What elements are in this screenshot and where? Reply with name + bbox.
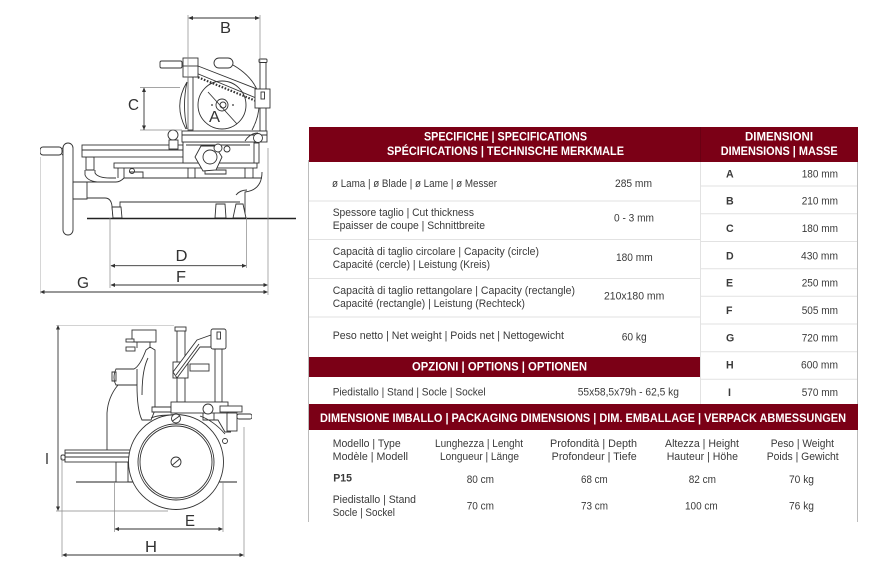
dimensions column: 570 mm bbox=[802, 387, 838, 399]
specification rows: Capacità di taglio rettangolare | Capacity (rectangle) bbox=[333, 285, 575, 297]
dimensions column: I bbox=[728, 387, 731, 399]
dimensions column: B bbox=[726, 196, 734, 208]
packaging table: 70 cm bbox=[467, 500, 494, 512]
dimension A: A bbox=[209, 109, 220, 126]
dimension G: G bbox=[77, 275, 89, 292]
dimensions column: A bbox=[726, 168, 734, 180]
packaging table: 82 cm bbox=[689, 474, 716, 486]
packaging table: 70 kg bbox=[789, 474, 814, 486]
side view drawing of the slicer bbox=[40, 15, 296, 295]
table frame and rules bbox=[308, 127, 858, 522]
packaging table: Hauteur | Höhe bbox=[667, 451, 738, 463]
packaging table: Peso | Weight bbox=[771, 438, 834, 450]
packaging table: 73 cm bbox=[581, 500, 608, 512]
header band: specifications and dimensions: SPECIFICHE | SPECIFICATIONS bbox=[424, 130, 587, 144]
specification rows: 180 mm bbox=[616, 252, 653, 264]
specifications table bbox=[308, 127, 858, 522]
specification rows: Epaisser de coupe | Schnittbreite bbox=[333, 220, 485, 232]
dimensions column: D bbox=[726, 250, 734, 262]
blade housing and blade bbox=[160, 58, 270, 163]
dimensions column: 430 mm bbox=[801, 250, 838, 262]
options band: OPZIONI | OPTIONS | OPTIONEN bbox=[412, 360, 587, 374]
header band: specifications and dimensions: DIMENSIONS | MASSE bbox=[721, 144, 838, 158]
carriage block and handle bbox=[171, 402, 252, 432]
dimensions column: G bbox=[726, 332, 734, 344]
machine base bbox=[85, 157, 262, 218]
front view drawing of the slicer bbox=[45, 325, 252, 557]
posts and clamp arm bbox=[173, 327, 226, 402]
packaging table: 76 kg bbox=[789, 500, 814, 512]
specification rows: Spessore taglio | Cut thickness bbox=[333, 207, 474, 219]
packaging table: Profondità | Depth bbox=[550, 438, 637, 450]
options row: Piedistallo | Stand | Socle | Sockel bbox=[333, 387, 486, 399]
dimension I bbox=[45, 325, 174, 511]
rear column and head bbox=[107, 330, 171, 450]
packaging table: Longueur | Länge bbox=[440, 451, 519, 463]
dimension C bbox=[128, 88, 182, 130]
dimension G bbox=[40, 157, 268, 294]
dimensions column bbox=[726, 168, 838, 399]
specification rows bbox=[332, 178, 664, 344]
specification rows: 285 mm bbox=[615, 178, 652, 190]
dimensions column: 250 mm bbox=[802, 278, 838, 290]
specification rows: 60 kg bbox=[622, 332, 647, 344]
packaging table: Modèle | Modell bbox=[333, 451, 408, 463]
sliding bar and foot bbox=[61, 450, 132, 482]
packaging table: Piedistallo | Stand bbox=[333, 494, 416, 506]
dimensions column: 210 mm bbox=[802, 196, 838, 208]
dimensions column: 720 mm bbox=[802, 332, 838, 344]
packaging table bbox=[333, 438, 839, 519]
packaging table: Poids | Gewicht bbox=[767, 451, 839, 463]
specification rows: 210x180 mm bbox=[604, 290, 664, 302]
dimension E: E bbox=[185, 513, 195, 530]
packaging table: Modello | Type bbox=[333, 438, 401, 450]
packaging table: Socle | Sockel bbox=[333, 507, 395, 519]
dimensions column: E bbox=[726, 278, 733, 290]
dimensions column: C bbox=[726, 223, 734, 235]
dimension H bbox=[62, 427, 244, 557]
row separators bbox=[309, 162, 857, 404]
dimensions column: F bbox=[726, 305, 733, 317]
packaging table: Lunghezza | Lenght bbox=[435, 438, 523, 450]
dimension F: F bbox=[176, 269, 186, 286]
specification rows: Capacité (cercle) | Leistung (Kreis) bbox=[333, 259, 490, 271]
dimension F bbox=[110, 148, 268, 295]
packaging table: Profondeur | Tiefe bbox=[552, 451, 637, 463]
specification rows: 0 - 3 mm bbox=[614, 213, 654, 225]
dimensions column: 600 mm bbox=[801, 360, 838, 372]
packaging table: 80 cm bbox=[467, 474, 494, 486]
ground line bbox=[87, 218, 296, 220]
packaging table: Altezza | Height bbox=[665, 438, 739, 450]
dimension E bbox=[114, 482, 223, 532]
packaging dimensions band bbox=[309, 404, 858, 430]
handwheel bbox=[128, 414, 228, 510]
dimension D: D bbox=[176, 248, 188, 265]
options row bbox=[333, 387, 679, 399]
carriage bbox=[82, 142, 257, 178]
header band: specifications and dimensions: DIMENSIONI bbox=[745, 130, 813, 144]
dimension C: C bbox=[128, 97, 139, 114]
header band: specifications and dimensions bbox=[309, 127, 858, 162]
dimensions column: 180 mm bbox=[802, 223, 838, 235]
specification rows: Capacité (rectangle) | Leistung (Rechteck) bbox=[333, 298, 525, 310]
dimension B: B bbox=[220, 20, 231, 37]
dimensions column: 505 mm bbox=[802, 305, 838, 317]
dimensions column: 180 mm bbox=[802, 168, 838, 180]
packaging table: 100 cm bbox=[685, 500, 718, 512]
header band: specifications and dimensions: SPÉCIFICATIONS | TECHNISCHE MERKMALE bbox=[387, 143, 624, 158]
options row: 55x58,5x79h - 62,5 kg bbox=[578, 387, 679, 399]
dimension I: I bbox=[45, 451, 49, 468]
dimension D bbox=[110, 218, 246, 288]
dimensions column: H bbox=[726, 360, 734, 372]
packaging table: 68 cm bbox=[581, 474, 608, 486]
ground line bbox=[76, 481, 237, 483]
dimension H: H bbox=[145, 539, 157, 556]
specification rows: Capacità di taglio circolare | Capacity (circle) bbox=[333, 246, 539, 258]
specification rows: Peso netto | Net weight | Poids net | Nettogewicht bbox=[333, 330, 564, 342]
packaging table: P15 bbox=[333, 473, 352, 485]
options band bbox=[309, 357, 700, 377]
dimension B bbox=[188, 15, 260, 130]
specification rows: ø Lama | ø Blade | ø Lame | ø Messer bbox=[332, 178, 497, 190]
handwheel and crank bbox=[40, 143, 87, 235]
